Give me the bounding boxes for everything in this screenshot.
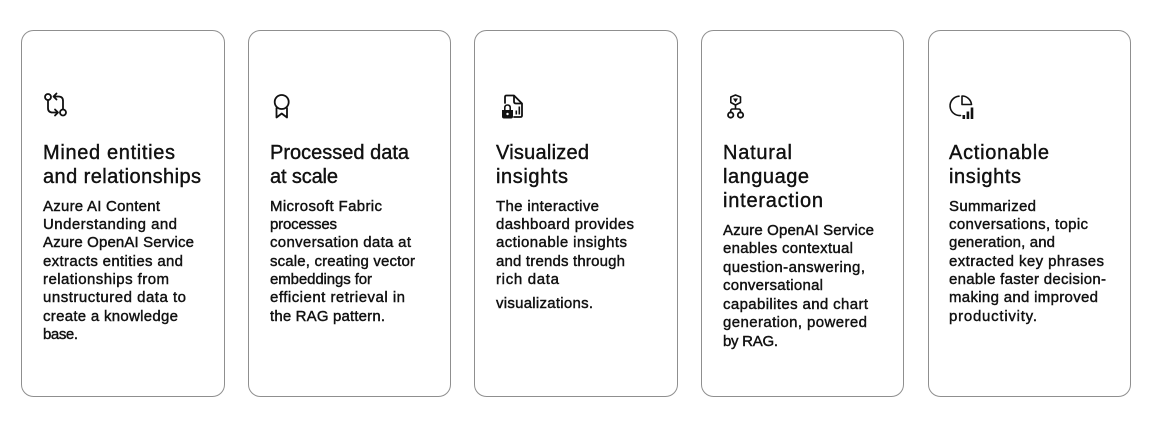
- panel: actionable insights: [928, 30, 1130, 396]
- text block: processed data description: efficient retrieval in: [270, 289, 405, 306]
- heading: mined entities and relationships: Mined entities: [43, 142, 175, 164]
- text block: actionable insights description: productivity.: [949, 308, 1037, 325]
- text block: visualized insights description: and trends through: [496, 253, 625, 270]
- text block: mined entities description: create a knowledge: [43, 308, 178, 325]
- text block: visualized insights description: [496, 198, 634, 312]
- text block: processed data description: scale, creating vector: [270, 253, 415, 270]
- text block: mined entities description: Azure AI Content: [43, 198, 161, 215]
- text block: actionable insights description: enable faster decision-: [949, 271, 1106, 288]
- heading: processed data at scale: at scale: [270, 166, 338, 188]
- text block: processed data description: embeddings for: [270, 271, 372, 288]
- text block: natural language description: question-answering,: [723, 259, 865, 276]
- heading: visualized insights: insights: [496, 166, 568, 188]
- text block: visualized insights description: The interactive: [496, 198, 599, 215]
- text block: actionable insights description: conversations, topic: [949, 216, 1088, 233]
- heading: mined entities and relationships: and relationships: [43, 166, 201, 188]
- heading: actionable insights: insights: [949, 166, 1021, 188]
- heading: actionable insights: [949, 142, 1049, 188]
- text block: natural language description: conversational: [723, 277, 823, 294]
- icon: branching arrows between nodes: [45, 94, 66, 116]
- text block: visualized insights description: visualizations.: [496, 295, 593, 312]
- text block: actionable insights description: making and improved: [949, 289, 1098, 306]
- heading: actionable insights: Actionable: [949, 142, 1049, 164]
- text block: visualized insights description: actionable insights: [496, 234, 627, 251]
- text block: visualized insights description: rich data: [496, 271, 560, 288]
- text block: visualized insights description: dashboard provides: [496, 216, 634, 233]
- icon: hierarchy with shield node: [728, 95, 743, 118]
- text block: processed data description: conversation data at: [270, 234, 412, 251]
- heading: visualized insights: [496, 142, 589, 188]
- text block: natural language description: [723, 222, 874, 350]
- heading: mined entities and relationships: [43, 142, 201, 188]
- text block: natural language description: generation, powered: [723, 314, 867, 331]
- text block: natural language description: capabilites and chart: [723, 296, 869, 313]
- text block: processed data description: [270, 198, 415, 325]
- heading: processed data at scale: [270, 142, 410, 188]
- text block: mined entities description: unstructured data to: [43, 289, 186, 306]
- heading: natural language interaction: interaction: [723, 190, 823, 212]
- text block: actionable insights description: generation, and: [949, 234, 1055, 251]
- heading: natural language interaction: [723, 142, 823, 212]
- heading: natural language interaction: language: [723, 166, 809, 188]
- text block: mined entities description: relationships from: [43, 271, 169, 288]
- panel: natural language interaction: [702, 30, 904, 396]
- text block: processed data description: Microsoft Fabric: [270, 198, 382, 215]
- panel: visualized insights: [474, 30, 678, 396]
- text block: mined entities description: Azure OpenAI Service: [43, 234, 194, 251]
- text block: actionable insights description: extracted key phrases: [949, 253, 1104, 270]
- text block: mined entities description: [43, 198, 194, 343]
- text block: mined entities description: extracts entities and: [43, 253, 183, 270]
- text block: actionable insights description: Summarized: [949, 198, 1036, 215]
- heading: visualized insights: Visualized: [496, 142, 589, 164]
- text block: actionable insights description: [949, 198, 1106, 325]
- text block: natural language description: enables contextual: [723, 240, 853, 257]
- text block: processed data description: the RAG pattern.: [270, 308, 385, 325]
- text block: processed data description: processes: [270, 216, 337, 233]
- heading: processed data at scale: Processed data: [270, 142, 410, 164]
- icon: award ribbon: [275, 95, 289, 118]
- text block: natural language description: by RAG.: [723, 333, 778, 350]
- icon: pie chart with bars: [950, 96, 973, 119]
- heading: natural language interaction: Natural: [723, 142, 792, 164]
- icon: locked report document: [502, 96, 522, 118]
- text block: mined entities description: Understanding and: [43, 216, 177, 233]
- text block: natural language description: Azure OpenAI Service: [723, 222, 874, 239]
- text block: mined entities description: base.: [43, 326, 78, 343]
- panel: mined entities and relationships: [22, 30, 224, 396]
- panel: processed data at scale: [248, 30, 450, 396]
